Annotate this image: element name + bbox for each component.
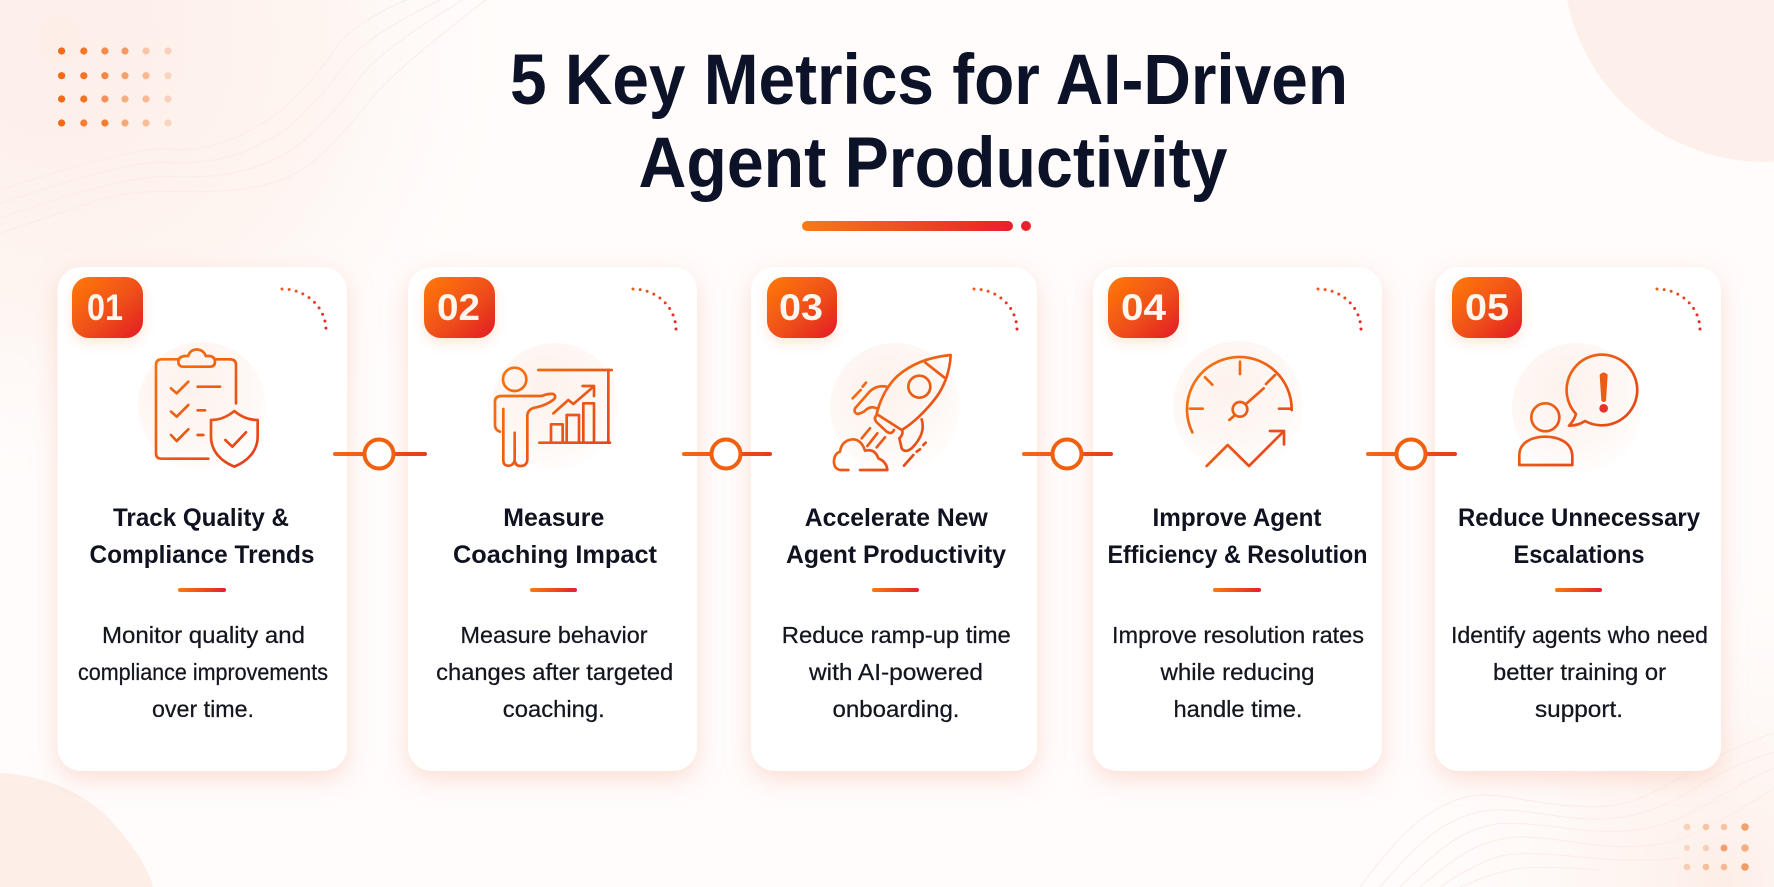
card 4 heading: Improve Agent bbox=[1152, 504, 1322, 532]
card 2 description: coaching. bbox=[503, 696, 605, 722]
title bbox=[510, 41, 1348, 203]
card 2 description bbox=[436, 622, 673, 722]
card 3 icon halo bbox=[830, 343, 960, 473]
connector 4 to 5 bbox=[1366, 440, 1457, 468]
card 5 description bbox=[1451, 622, 1708, 722]
card 4 heading: Efficiency & Resolution bbox=[1108, 541, 1368, 569]
card 4 dotted arc bbox=[1318, 289, 1361, 330]
card 5 divider bbox=[1555, 588, 1602, 592]
card 1 number badge bbox=[72, 277, 143, 338]
card 5 number badge bbox=[1452, 277, 1522, 338]
card 3 description: Reduce ramp-up time bbox=[782, 622, 1011, 648]
card 3 background bbox=[751, 267, 1037, 771]
card 3 description: onboarding. bbox=[832, 696, 960, 722]
card 1 heading: Compliance Trends bbox=[90, 541, 314, 569]
panel: card 2 bbox=[408, 267, 697, 771]
card 4 description bbox=[1112, 622, 1364, 722]
card 1 divider bbox=[178, 588, 226, 592]
card 4 description: handle time. bbox=[1174, 696, 1302, 722]
title underline bbox=[802, 221, 1031, 231]
connector 1 to 2 bbox=[333, 440, 427, 468]
card 1 description: over time. bbox=[152, 696, 254, 722]
card 3 heading: Accelerate New bbox=[805, 504, 988, 532]
card 4 number badge: 04 bbox=[1121, 287, 1166, 328]
title: Agent Productivity bbox=[638, 124, 1228, 203]
card 1 heading bbox=[90, 504, 314, 569]
card 5 description: better training or bbox=[1493, 659, 1666, 685]
card 2 dotted arc bbox=[633, 289, 676, 330]
dot grid bottom right bbox=[1684, 823, 1749, 871]
card 4 background bbox=[1093, 267, 1382, 771]
card 4 icon halo bbox=[1173, 341, 1303, 471]
card 1 icon halo bbox=[138, 342, 266, 470]
card 5 dotted arc bbox=[1657, 289, 1700, 330]
card 5 heading bbox=[1458, 504, 1700, 569]
card 3 divider bbox=[872, 588, 919, 592]
card 5 heading: Reduce Unnecessary bbox=[1458, 504, 1700, 532]
card 1 dotted arc bbox=[282, 289, 326, 330]
connector 3 to 4 bbox=[1022, 440, 1113, 468]
card 5 heading: Escalations bbox=[1514, 541, 1644, 569]
card 2 icon halo bbox=[492, 343, 618, 469]
card 3 description bbox=[782, 622, 1011, 722]
card 4 description: Improve resolution rates bbox=[1112, 622, 1364, 648]
panel: card 3 bbox=[751, 267, 1037, 771]
card 5 description: support. bbox=[1535, 696, 1623, 722]
icon: person with alert bubble bbox=[1519, 355, 1637, 465]
card 2 number badge bbox=[424, 277, 495, 338]
card 5 background bbox=[1435, 267, 1721, 771]
card 3 number badge: 03 bbox=[779, 287, 823, 328]
card 3 description: with AI-powered bbox=[808, 659, 983, 685]
card 3 dotted arc bbox=[974, 289, 1017, 330]
card 1 heading: Track Quality & bbox=[113, 504, 289, 532]
icon: rocket bbox=[834, 355, 951, 470]
card 1 description bbox=[78, 622, 328, 722]
card 1 background bbox=[58, 267, 347, 771]
card 1 number badge: 01 bbox=[87, 287, 123, 328]
card 4 divider bbox=[1213, 588, 1261, 592]
card 1 description: compliance improvements bbox=[78, 659, 328, 685]
panel: card 5 bbox=[1435, 267, 1721, 771]
card 4 number badge bbox=[1108, 277, 1179, 338]
card 2 number badge: 02 bbox=[437, 287, 480, 328]
card 2 heading bbox=[453, 504, 658, 569]
card 4 heading bbox=[1108, 504, 1368, 569]
panel: card 1 bbox=[58, 267, 347, 771]
card 5 icon halo bbox=[1512, 343, 1642, 473]
card 2 background bbox=[408, 267, 697, 771]
icon: speedometer with trend arrow bbox=[1187, 357, 1292, 466]
card 2 description: Measure behavior bbox=[460, 622, 648, 648]
card 3 number badge bbox=[767, 277, 837, 338]
panel: card 4 bbox=[1093, 267, 1382, 771]
card 2 heading: Measure bbox=[503, 504, 604, 532]
connector 2 to 3 bbox=[682, 440, 772, 468]
icon: clipboard and shield bbox=[156, 349, 258, 467]
icon: presenter with chart bbox=[495, 368, 612, 466]
card 2 divider bbox=[530, 588, 577, 592]
title: 5 Key Metrics for AI-Driven bbox=[510, 41, 1348, 120]
card 2 heading: Coaching Impact bbox=[453, 541, 658, 569]
card 3 heading: Agent Productivity bbox=[786, 541, 1006, 569]
card 5 number badge: 05 bbox=[1465, 287, 1509, 328]
card 3 heading bbox=[786, 504, 1006, 569]
card 5 description: Identify agents who need bbox=[1451, 622, 1708, 648]
card 2 description: changes after targeted bbox=[436, 659, 673, 685]
card 4 description: while reducing bbox=[1159, 659, 1314, 685]
dot grid top left bbox=[58, 47, 172, 127]
card 1 description: Monitor quality and bbox=[102, 622, 305, 648]
